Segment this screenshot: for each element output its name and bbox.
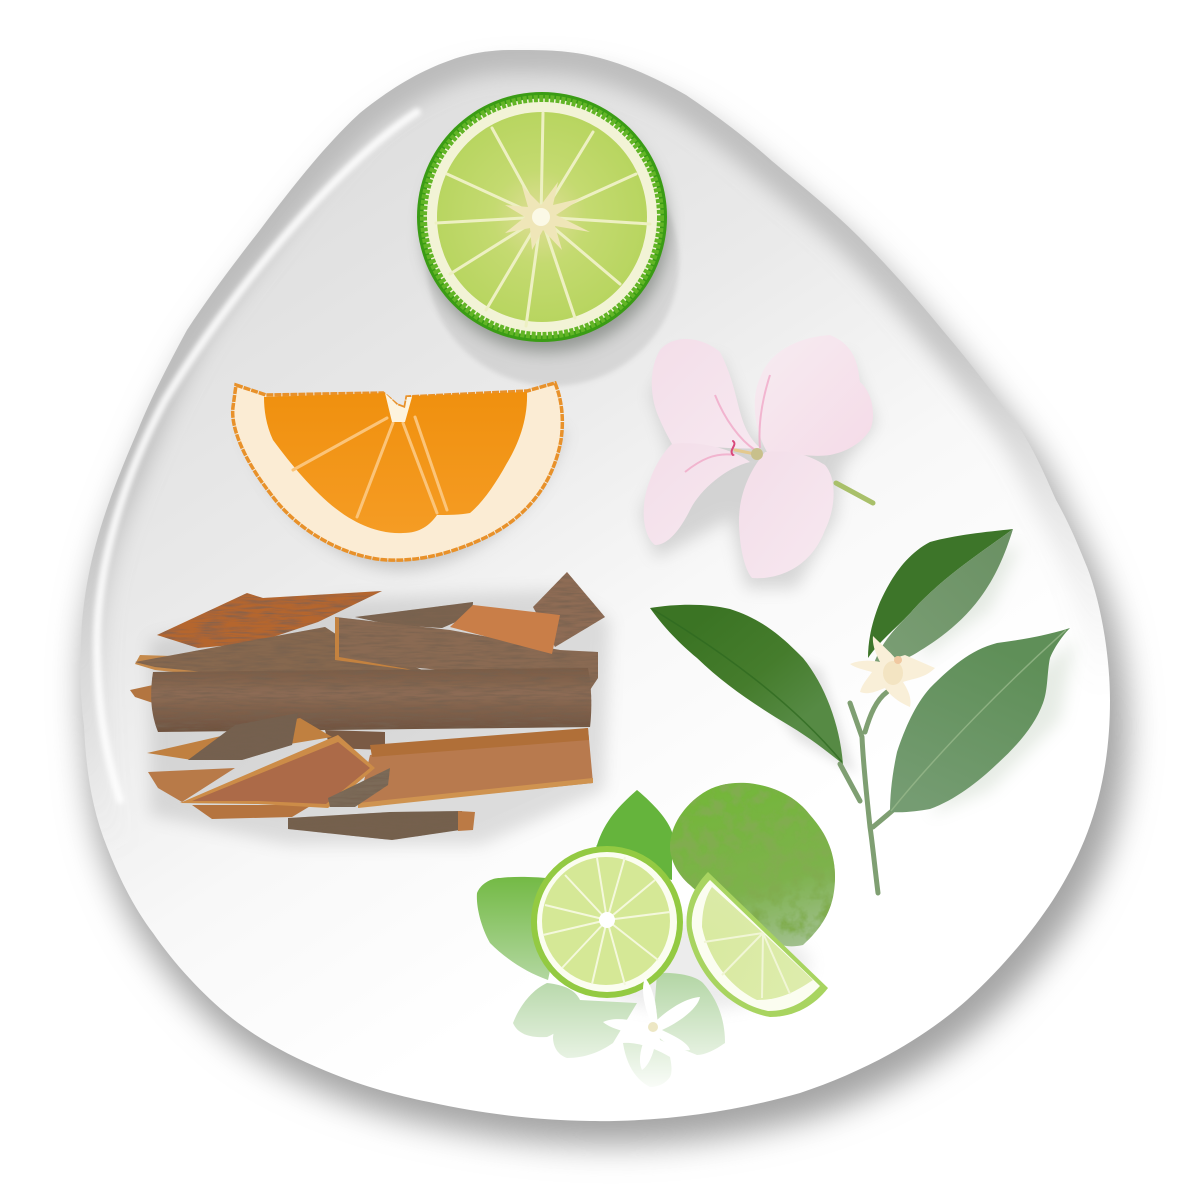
plate shadow — [83, 74, 1128, 1145]
cinnamon: long bark underside — [135, 655, 425, 684]
orange peel and pith — [233, 383, 562, 560]
cinnamon: big shard inner — [192, 742, 370, 804]
lime half — [531, 846, 683, 998]
flower centre — [732, 441, 763, 460]
sprig shadow — [920, 545, 1075, 815]
bergamot shadow — [570, 920, 810, 1010]
faded leaf D — [623, 1043, 672, 1087]
blossom stamens — [894, 656, 902, 664]
orange shadow — [245, 430, 565, 570]
lime contact shadow — [424, 108, 668, 352]
lime wedge flesh — [702, 887, 813, 1000]
plate rim shading — [80, 50, 1100, 766]
petal: lower right — [739, 451, 834, 578]
lime half pith — [537, 852, 677, 992]
orange membranes — [293, 417, 447, 517]
faded leaf B — [553, 1000, 637, 1058]
leaf midribs — [652, 609, 1066, 811]
cinnamon: big shard edge — [180, 735, 375, 808]
cinnamon: orange shard — [157, 591, 382, 648]
lime half membranes — [543, 857, 670, 985]
orange wedge — [233, 383, 565, 570]
lime half core — [599, 912, 615, 928]
lime slice — [417, 92, 679, 386]
white blossom — [603, 978, 700, 1070]
plate highlight — [97, 112, 417, 800]
cinnamon: lower tube bottom edge — [358, 778, 593, 808]
cinnamon: bottom bark — [288, 811, 462, 840]
citrus sprig — [650, 529, 1075, 893]
cinnamon: long bark — [135, 627, 425, 680]
cinnamon: orange stick — [450, 605, 560, 654]
plate face — [80, 50, 1110, 1121]
cinnamon: dark bark chip — [188, 713, 298, 760]
bergamot group — [477, 783, 835, 1087]
lime half flesh — [542, 857, 670, 985]
petal: lower left — [644, 443, 750, 545]
lime flesh — [437, 112, 647, 322]
lime wedge membranes — [704, 933, 790, 998]
cinnamon sticks — [130, 572, 610, 845]
leaf: left — [650, 605, 843, 764]
lime wedge pith — [692, 880, 820, 1011]
leaf: top right lower half — [872, 529, 1013, 670]
cinnamon: bark overlay edge — [335, 617, 425, 672]
cinnamon: left stub — [130, 685, 153, 703]
blossom centre — [883, 661, 903, 685]
whole bergamot — [670, 783, 835, 946]
cinnamon: mid bark — [355, 602, 473, 628]
cinnamon shadow — [150, 590, 610, 845]
cinnamon: lower tube — [358, 728, 593, 807]
cinnamon: main tube — [151, 668, 591, 732]
lime serrated rind — [424, 98, 660, 336]
flower shadow — [641, 353, 876, 588]
cinnamon: bark behind lower — [325, 730, 385, 750]
cinnamon: bark overlay — [335, 617, 598, 690]
cinnamon: small chip — [328, 768, 390, 807]
plate — [80, 50, 1110, 1121]
cinnamon: bottom bark end — [458, 811, 475, 831]
flower veins — [685, 375, 770, 472]
left leaf shadow — [706, 619, 856, 774]
leaf: top right — [868, 529, 1013, 658]
cinnamon: lower tube top edge — [370, 728, 589, 757]
petal: upper right — [755, 335, 873, 456]
bergamot leaf: top — [596, 790, 672, 880]
lime wedge rind — [687, 872, 828, 1017]
orange centre pith — [385, 393, 412, 422]
petal: upper left — [652, 339, 760, 448]
blossom — [850, 636, 935, 707]
cinnamon: lower strip — [192, 805, 312, 819]
leaf: right — [890, 628, 1070, 812]
cinnamon: bark top right — [533, 572, 605, 647]
pink flower — [641, 335, 876, 588]
bergamot leaf: left — [477, 877, 560, 980]
flower stem — [836, 483, 873, 503]
faded leaf C — [655, 973, 725, 1055]
orange flesh — [264, 392, 527, 533]
cinnamon: orange shard behind — [147, 718, 332, 760]
lime membranes — [436, 113, 650, 326]
lime centre — [532, 208, 550, 226]
lime soft shadow — [427, 138, 679, 386]
blossom centre small — [648, 1022, 658, 1032]
cinnamon: lower left piece — [148, 768, 235, 802]
faded leaf A — [513, 983, 580, 1037]
lime core — [505, 182, 590, 250]
faded leaves — [513, 973, 725, 1087]
lime rind — [417, 92, 667, 342]
sprig stem — [840, 692, 892, 893]
